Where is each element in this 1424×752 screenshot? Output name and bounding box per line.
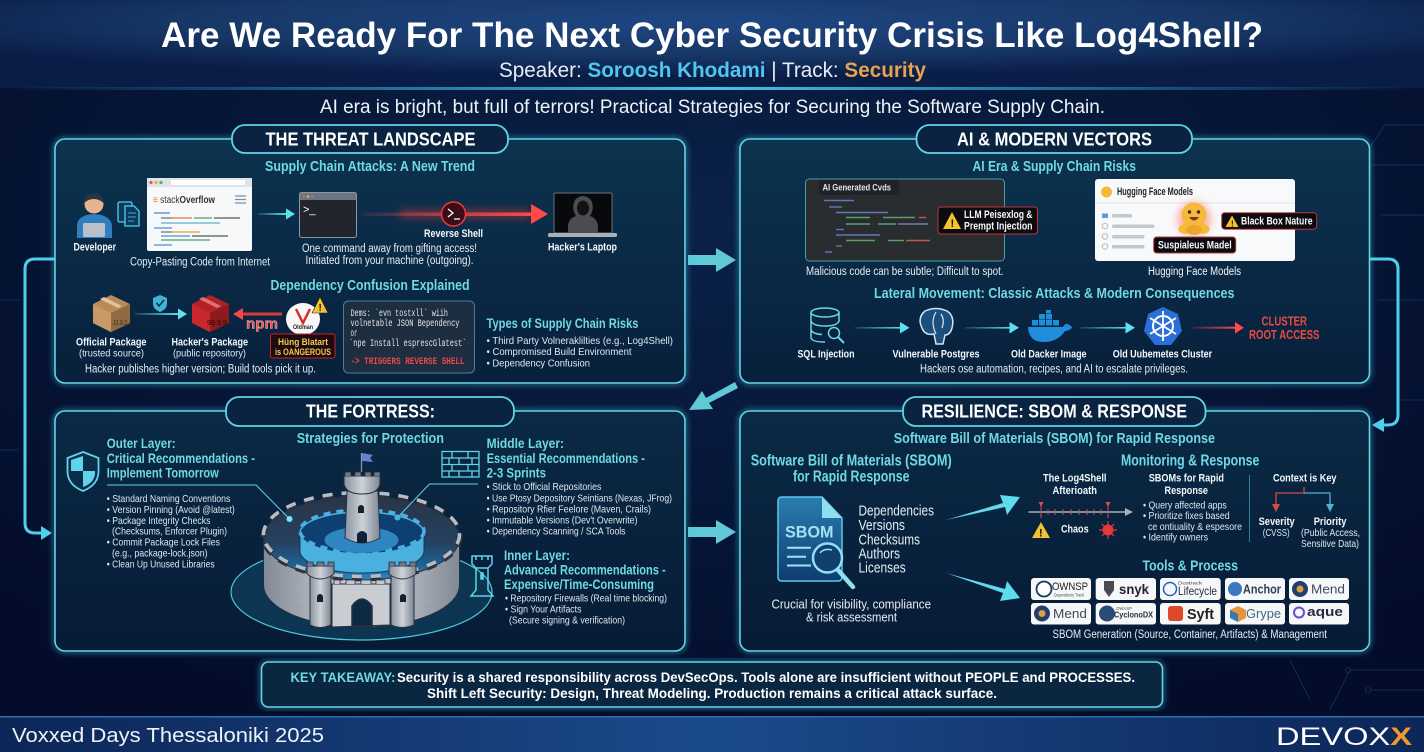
icon: kubernetes wheel [1144,307,1182,345]
hacker's package [172,295,248,360]
caption: one command away: Initiated from your machine (outgoing). [306,255,474,267]
warning: black box nature: ! [1231,220,1234,228]
hugging face card: Hugging Face Models [1117,186,1193,198]
icon: shield [68,452,98,491]
panel: resilience [740,397,1370,651]
icon: copied documents [118,202,139,226]
arrow: npm to hacker's package [233,308,282,320]
SBOM contents list [858,504,934,577]
outer layer list: (Checksums, Enforcer Plugin) [112,526,227,538]
outer layer list: • Standard Naming Conventions [107,493,230,505]
middle layer list [487,481,672,537]
outer layer list: • Package Integrity Checks [107,515,210,527]
tool logos: Lifecycle [1178,584,1217,598]
heading: lateral movement: Lateral Movement: Classic Attacks & Modern Consequences [874,285,1234,302]
outer layer list: • Version Pinning (Avoid @latest) [107,504,235,516]
context is key: Sensitive Data) [1301,538,1359,550]
heading: monitoring and response: Monitoring & Response [1121,453,1260,470]
middle layer heading [487,435,645,481]
arrow: AI vectors to fortress [689,382,738,410]
types of supply chain risks: • Compromised Build Environment [486,346,632,358]
icon: hugging face emoji [1177,202,1211,236]
types of supply chain risks: • Third Party Volneraklilties (e.g., Log4Shell) [486,335,673,347]
callout line: outer layer [107,485,292,522]
key takeaway callout [262,662,1162,707]
terminal window: >_ [303,204,316,216]
lateral movement labels: Old Dacker Image [1011,349,1086,361]
tool logos: Dependency Track [1054,592,1085,598]
version badge with warning: Oldman [293,325,313,331]
danger badge: Hüng Blatart [278,337,328,347]
icon: SBOM document: SBOM [785,523,834,542]
caption: copy-pasting: Copy-Pasting Code from Internet [130,256,271,268]
official package: (trusted source) [79,348,144,360]
context is key [1259,473,1360,550]
caption: hacker publishes: Hacker publishes higher version; Build tools pick it up. [85,364,316,376]
caption: one command away: One command away from gifting access! [302,243,477,255]
middle layer list: • Immutable Versions (Dev't Overwrite) [487,514,638,526]
tool logos: Dustrack [1178,580,1203,586]
types of supply chain risks: • Dependency Confusion [486,358,590,370]
lateral movement labels [798,349,1213,361]
tool logos [1031,578,1349,624]
warning: LLM poisoning: ! [950,218,954,230]
tool logos: CyclonoDX [1114,610,1153,620]
caption: hugging face models: Hugging Face Models [1148,266,1241,278]
arrow: SBOM to tools [946,573,1020,601]
terminal example: Dems: `evn tostxll` wiih [350,307,448,320]
arrow: threat landscape down to fortress via left rail [25,259,55,540]
footer band [0,716,1424,752]
lateral movement labels: Vulnerable Postgres [892,349,980,361]
header band [0,0,1424,90]
arrow: AI vectors down to resilience via right rail [1369,259,1398,432]
logo: devoxx: DEVOX X [1276,723,1412,751]
log4shell aftermath timeline [1028,473,1133,540]
inner layer list [505,593,667,626]
outer layer list: • Clean Up Unused Libraries [107,558,215,570]
caption: crucial for visibility: Crucial for visibility, compliance [772,597,931,611]
terminal example [344,301,474,373]
outer layer list: • Commit Package Lock Files [107,537,220,549]
npm label: npm [246,316,278,332]
log4shell aftermath timeline: The Log4Shell [1043,473,1106,485]
SBOMs for rapid response: ce ontiuality & espesore [1148,521,1242,533]
icon: brick wall [442,452,479,477]
warning: LLM poisoning: Prempt Injection [964,220,1033,232]
terminal example: volnetable JSON Bependency [350,318,460,330]
SBOMs for rapid response: Response [1164,485,1208,497]
hacker's package: 99.9.9 [207,320,227,327]
terminal window [300,192,356,238]
panel: AI and modern vectors [740,125,1370,383]
middle layer list: • Repository Rfier Feelore (Maven, Crails) [487,503,651,515]
heading: tools and process: Tools & Process [1142,558,1238,575]
SBOMs for rapid response: • Prioritize fixes based [1143,510,1230,522]
log4shell aftermath timeline: Afterioath [1052,485,1097,497]
icon: developer [74,193,117,254]
outer layer heading: Outer Layer: [107,435,176,451]
inner layer list: • Repository Firewalls (Real time blocking) [505,593,667,605]
outer layer list: (e.g., package-lock.json) [112,548,208,560]
icon: SQL injection database [811,308,844,343]
terminal example: `npe Install esprescGlatest` [349,337,466,350]
hacker's package: Hacker's Package [172,336,248,348]
stack overflow browser [147,178,252,251]
panel title: AI and modern vectors [916,125,1192,153]
key takeaway callout: Shift Left Security: Design, Threat Modeling. Production remains a critical attack surface. [427,685,997,701]
SBOM contents list: Dependencies [858,504,934,520]
key takeaway callout: KEY TAKEAWAY: [290,669,396,685]
terminal example: or [350,329,358,340]
warning: suspicious model [1154,237,1236,253]
tool logos: snyk [1119,581,1149,597]
icon: docker whale [1028,310,1072,342]
left heading: SBOM [751,453,952,486]
tool logos: Mend [1311,582,1345,596]
middle layer list: • Use Ptosy Depository Seintians (Nexas, JFrog) [487,493,672,505]
lateral movement labels: SQL Injection [798,349,855,361]
hugging face card [1095,179,1295,261]
terminal example: -> TRIGGERS REVERSE SHELL [350,357,464,368]
inner layer list: • Sign Your Artifacts [505,603,582,615]
official package: JJ.0.2 [113,320,127,327]
context is key: Context is Key [1273,473,1337,485]
AI generated code window [806,179,1004,261]
caption: one command away [302,243,477,267]
context is key: Severity [1259,516,1295,528]
arrow: reverse shell [363,202,548,240]
arrow: reverse shell: Reverse Shell [424,228,483,240]
panel title: AI and modern vectors: AI & MODERN VECTORS [957,130,1152,150]
middle layer heading: Essential Recommendations - [487,450,645,466]
inner layer heading: Expensive/Time-Consuming [504,576,654,592]
caption: crucial for visibility: & risk assessment [806,611,897,625]
SBOMs for rapid response: • Query affected apps [1143,499,1227,511]
arrow: browser to terminal [258,208,295,220]
tool logos: Grype [1246,606,1281,621]
illustration: fortress castle [231,453,492,640]
version badge with warning [286,297,328,335]
arrow: threat landscape to AI vectors [688,248,736,272]
heading: SBOM rapid response: Software Bill of Materials (SBOM) for Rapid Response [894,430,1215,447]
inner layer list: (Secure signing & verification) [509,614,625,626]
warning: LLM poisoning [938,207,1038,234]
panel title: the threat landscape: THE THREAT LANDSCAPE [266,130,476,150]
AI generated code window: AI Generated Cvds [822,182,891,194]
heading: strategies: Strategies for Protection [297,430,444,447]
warning: black box nature: Black Box Nature [1241,216,1312,228]
SBOM contents list: Versions [858,518,905,534]
panel title: the threat landscape [232,125,508,153]
icon: shield check [153,295,167,312]
caption: hackers use automation: Hackers ose automation, recipes, and AI to escalate privileges. [920,364,1188,376]
heading: supply chain attacks: Supply Chain Attacks: A New Trend [265,158,475,175]
tool logos: Anchor [1243,582,1281,596]
panel title: the fortress: THE FORTRESS: [306,402,435,422]
speaker and track: Speaker: Soroosh Khodami | Track: Security [499,59,926,82]
cluster root access: ROOT ACCESS [1249,327,1320,342]
hacker's package: (public repository) [173,348,246,360]
arrow: SBOM to monitoring [946,495,1020,520]
callout line: middle layer [394,484,478,520]
SBOMs for rapid response: • Identify owners [1143,532,1208,544]
lateral movement labels: Old Uubemetes Cluster [1113,349,1213,361]
types of supply chain risks: Types of Supply Chain Risks [486,315,639,331]
caption: malicious code: Malicious code can be subtle; Difficult to spot. [806,266,1004,278]
heading: AI era: AI Era & Supply Chain Risks [972,158,1136,175]
icon: SBOM document [778,497,853,587]
middle layer list: • Stick to Official Repositories [487,481,601,493]
SBOM contents list: Authors [858,546,900,562]
icon: hacker's laptop [548,193,617,254]
panel title: the fortress [226,397,514,426]
left heading: SBOM: Software Bill of Materials (SBOM) [751,453,952,470]
arrow: kubernetes to cluster root access [1191,322,1244,334]
icon: hacker's laptop: Hacker's Laptop [548,242,617,254]
danger badge [270,334,335,358]
event name: Voxxed Days Thessaloniki 2025 [12,725,324,747]
stack overflow browser: ≡ stackOverflow [153,195,215,206]
tagline: AI era is bright, but full of terrors! Practical Strategies for Securing the Software Supply Chain. [320,97,1105,118]
context is key: (Public Access, [1301,527,1360,539]
middle layer heading: 2-3 Sprints [487,465,546,481]
arrow: docker to kubernetes [1080,322,1135,334]
middle layer heading: Middle Layer: [487,435,564,451]
log4shell aftermath timeline: ! [1039,528,1043,540]
title: Are We Ready For The Next Cyber Security Crisis Like Log4Shell? [161,16,1263,55]
caption: crucial for visibility [772,597,931,625]
types of supply chain risks [486,315,673,370]
SBOM contents list: Licenses [858,561,906,577]
official package: Official Package [76,336,146,348]
version badge with warning: ! [318,303,322,314]
context is key: Priority [1314,516,1347,528]
SBOMs for rapid response [1143,473,1242,544]
heading: dependency confusion: Dependency Confusion Explained [270,277,470,294]
arrow: postgres to docker [965,322,1019,334]
cluster root access: CLUSTER [1262,314,1307,329]
outer layer list [107,493,235,570]
caption: SBOM generation: SBOM Generation (Source, Container, Artifacts) & Management [1052,629,1328,641]
icon: tower [471,556,493,596]
icon: developer: Developer [74,242,117,254]
inner layer heading: Inner Layer: [504,547,570,563]
arrow: official to hacker's package [135,308,187,320]
warning: suspicious model: Suspialeus Madel [1158,240,1232,252]
panel: the fortress [55,397,685,651]
cluster root access [1249,314,1320,342]
outer layer heading: Critical Recommendations - [107,450,255,466]
warning: LLM poisoning: LLM Peisexlog & [964,209,1033,221]
SBOM contents list: Checksums [858,532,920,548]
panel title: resilience [903,397,1206,426]
tool logos: OWNSP [1052,581,1088,593]
tool logos: aque [1307,605,1343,619]
SBOMs for rapid response: SBOMs for Rapid [1149,473,1224,485]
danger badge: is OANGEROUS [275,347,331,357]
outer layer heading: Implement Tomorrow [107,465,219,481]
inner layer heading [504,547,666,592]
key takeaway callout: Security is a shared responsibility across DevSecOps. Tools alone are insufficient without PEOPLE and PROCESSES. [397,669,1135,685]
icon: postgres elephant [920,308,953,344]
middle layer list: • Dependency Scanning / SCA Tools [487,525,626,537]
tool logos: OWASP [1116,606,1132,611]
left heading: SBOM: for Rapid Response [793,469,910,486]
inner layer heading: Advanced Recommendations - [504,561,666,577]
panel title: resilience: RESILIENCE: SBOM & RESPONSE [922,402,1187,422]
outer layer heading [107,435,255,481]
tool logos: Syft [1187,606,1214,623]
arrow: fortress to resilience [688,520,736,544]
log4shell aftermath timeline: Chaos [1061,524,1089,536]
warning: black box nature [1222,213,1317,229]
official package [76,295,146,360]
arrow: SQL to postgres [855,322,910,334]
tool logos: Mend [1053,607,1087,621]
context is key: (CVSS) [1263,527,1290,539]
panel: the threat landscape [55,125,685,383]
